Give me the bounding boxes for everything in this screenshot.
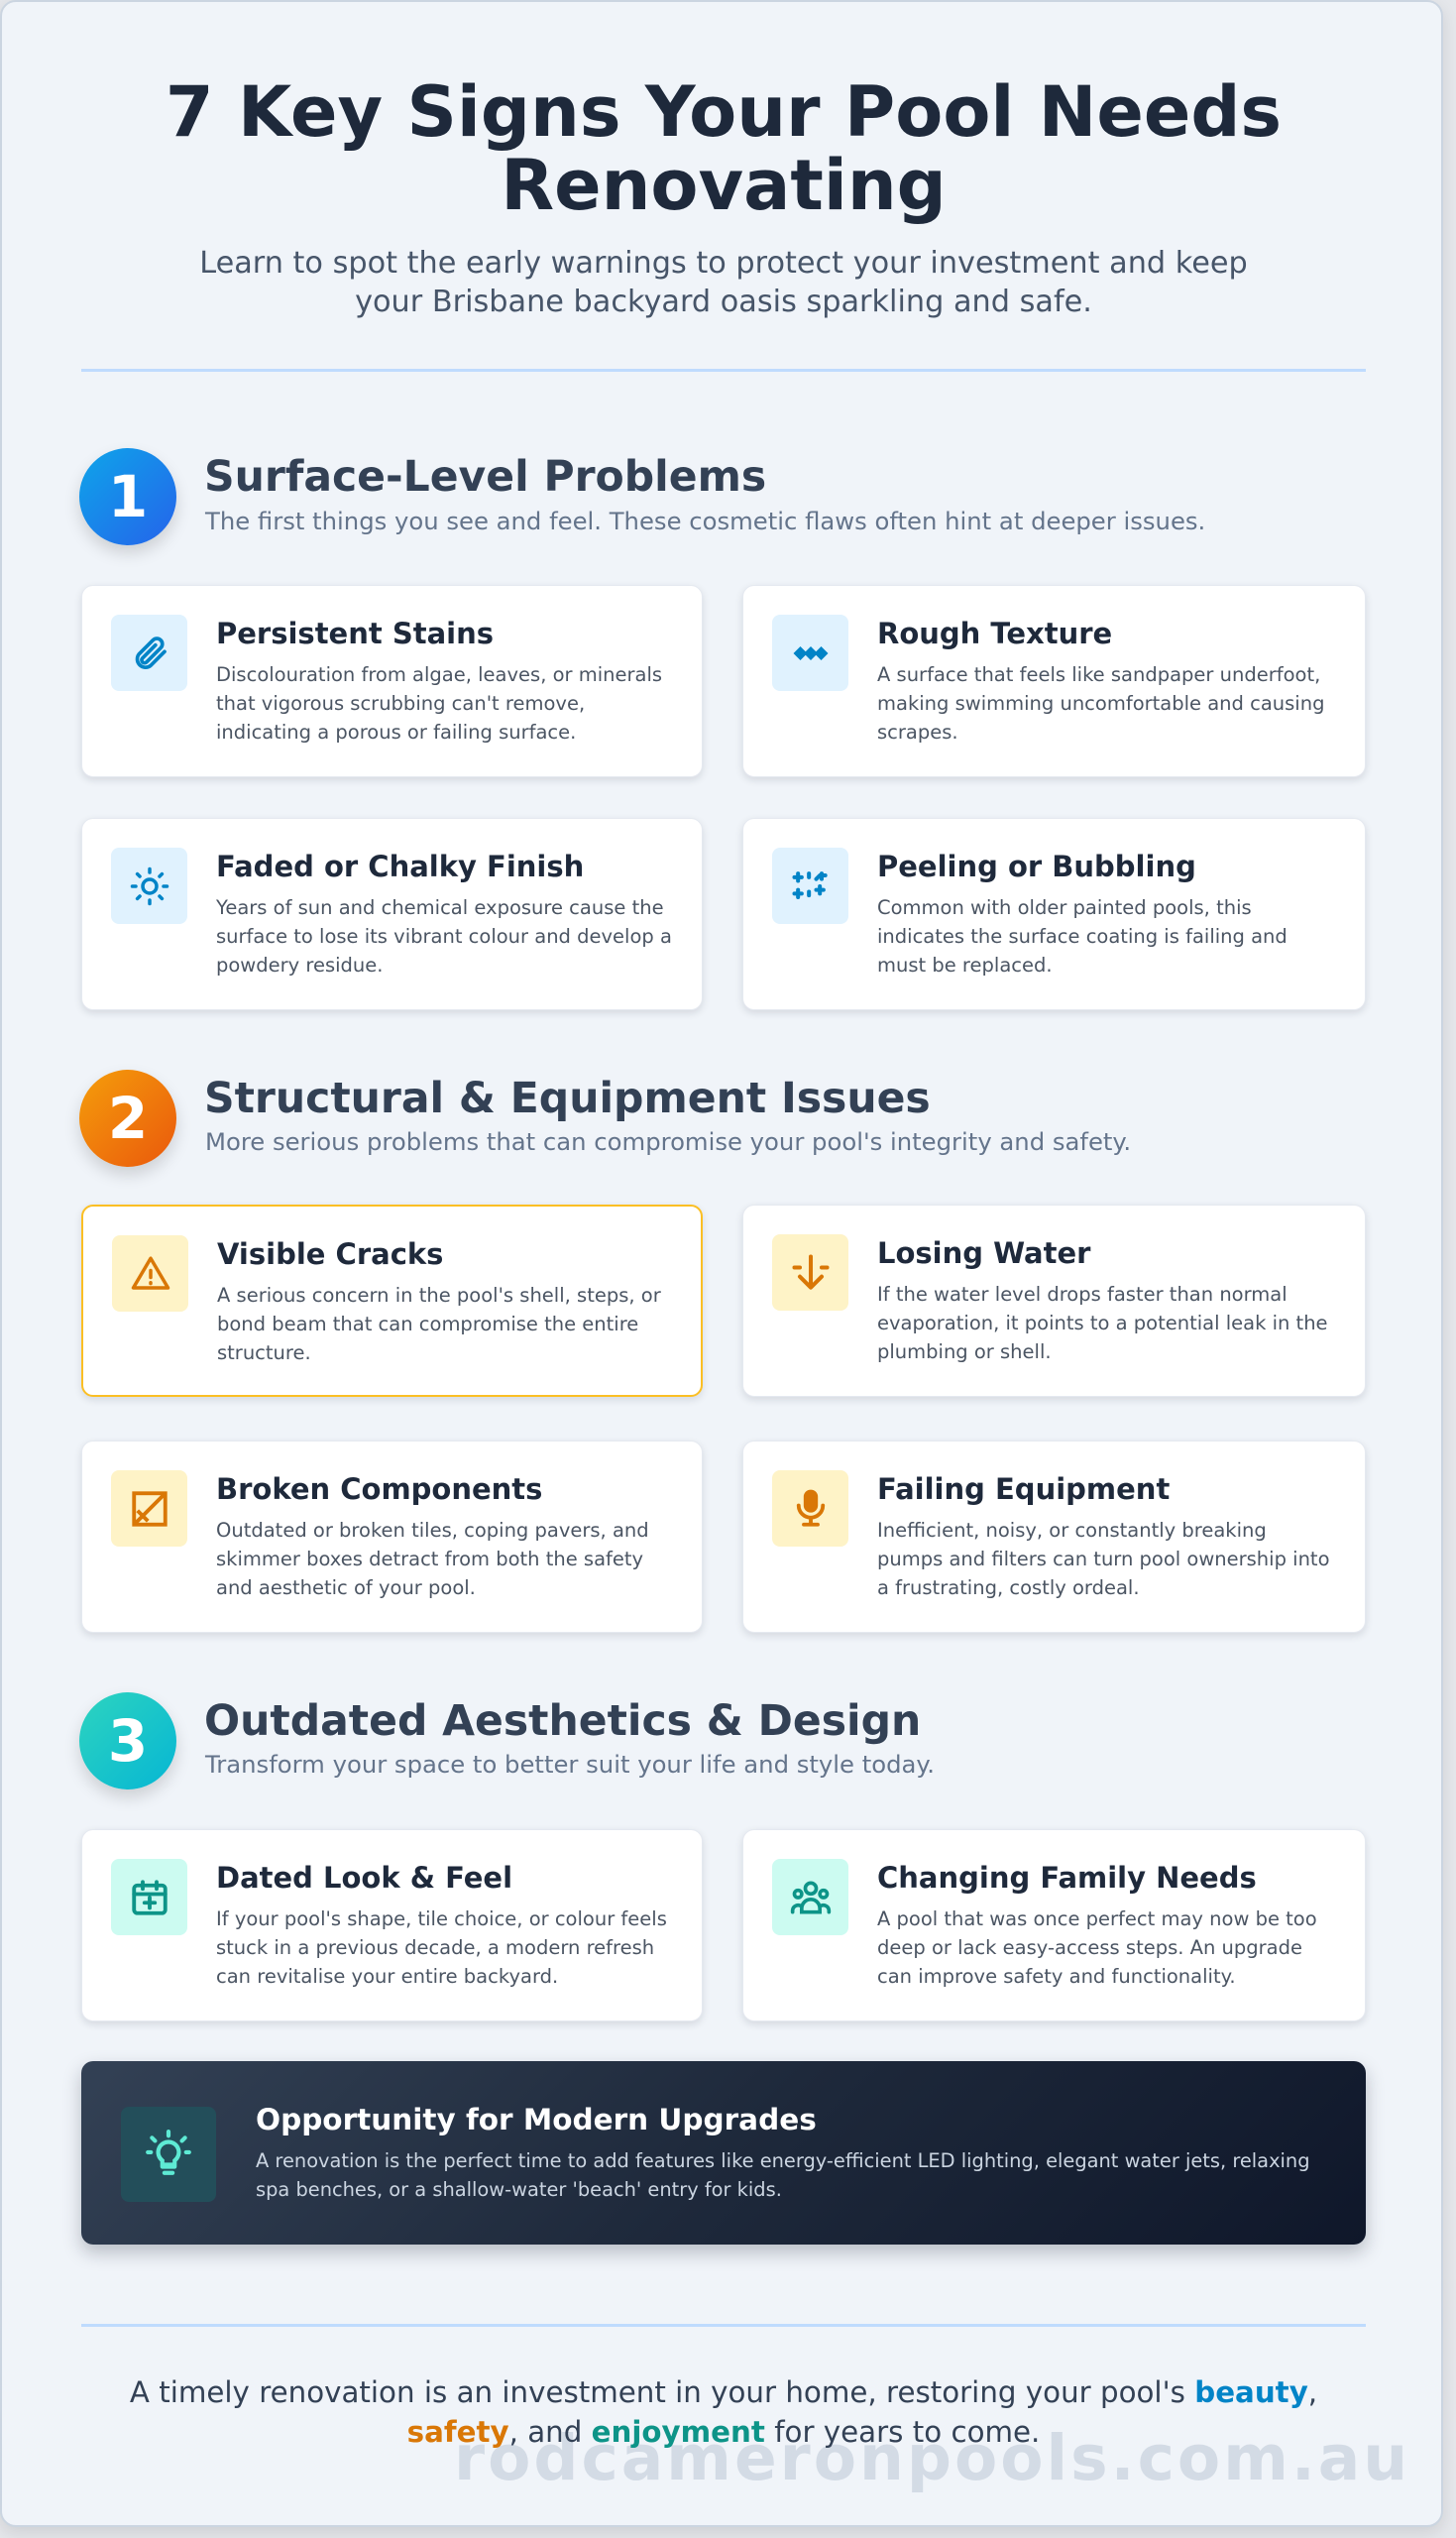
card: faded finish: powdery residue. — [216, 954, 383, 977]
card: visible cracks: Visible Cracks — [217, 1237, 443, 1271]
card: persistent stains: Discolouration from algae, leaves, or minerals — [216, 663, 662, 686]
card: failing equipment: Failing Equipment — [877, 1472, 1170, 1506]
icon: texture — [772, 615, 848, 691]
card: broken components: skimmer boxes detract from both the safety — [216, 1548, 643, 1570]
icon: paperclip — [111, 615, 187, 691]
watermark: rodcameronpools.com.au — [454, 2422, 1410, 2494]
section 3 number badge: 3 — [108, 1707, 148, 1775]
card: family needs: A pool that was once perfect may now be too — [877, 1907, 1317, 1930]
icon: microphone — [772, 1470, 848, 1547]
banner title: Opportunity for Modern Upgrades — [256, 2103, 817, 2136]
title: Renovating — [501, 145, 947, 226]
card: visible cracks: A serious concern in the pool's shell, steps, or — [217, 1284, 661, 1307]
banner text: spa benches, or a shallow-water 'beach' entry for kids. — [256, 2178, 782, 2201]
card: losing water: plumbing or shell. — [877, 1340, 1052, 1363]
icon: calendar — [111, 1859, 187, 1935]
card: dated look: stuck in a previous decade, a modern refresh — [216, 1936, 654, 1959]
card: family needs: deep or lack easy-access steps. An upgrade — [877, 1936, 1302, 1959]
card: broken components — [81, 1441, 703, 1633]
subtitle: Learn to spot the early warnings to protect your investment and keep — [199, 246, 1248, 281]
card: rough texture: Rough Texture — [877, 617, 1112, 650]
icon: sparkles — [772, 848, 848, 924]
section 3 number badge — [79, 1692, 176, 1789]
card: peeling: Peeling or Bubbling — [877, 850, 1196, 883]
icon: sun — [111, 848, 187, 924]
banner: modern upgrades — [81, 2061, 1366, 2245]
card: peeling: indicates the surface coating is failing and — [877, 925, 1288, 948]
card: broken components: and aesthetic of your pool. — [216, 1576, 476, 1599]
title — [166, 71, 1282, 226]
card: faded finish: Faded or Chalky Finish — [216, 850, 584, 883]
banner text — [256, 2149, 1310, 2201]
icon: warning — [112, 1235, 188, 1312]
card: faded finish — [81, 818, 703, 1010]
card: persistent stains: indicating a porous or failing surface. — [216, 721, 576, 744]
card: rough texture: making swimming uncomfortable and causing — [877, 692, 1324, 715]
card: peeling — [742, 818, 1366, 1010]
card: persistent stains: that vigorous scrubbing can't remove, — [216, 692, 585, 715]
section 2 number badge: 2 — [108, 1085, 148, 1152]
card: broken components: Broken Components — [216, 1472, 542, 1506]
card: failing equipment: pumps and filters can turn pool ownership into — [877, 1548, 1330, 1570]
card: family needs: Changing Family Needs — [877, 1861, 1257, 1895]
icon: lightbulb — [121, 2107, 216, 2202]
card: faded finish: Years of sun and chemical exposure cause the — [216, 896, 664, 919]
card: visible cracks — [81, 1205, 703, 1397]
section 2 number badge — [79, 1070, 176, 1167]
card: peeling: must be replaced. — [877, 954, 1053, 977]
footer text — [130, 2375, 1317, 2449]
card: persistent stains: Persistent Stains — [216, 617, 494, 650]
icon: arrow down — [772, 1234, 848, 1311]
section 1 heading: Surface-Level Problems — [204, 453, 766, 502]
title: 7 Key Signs Your Pool Needs — [166, 71, 1282, 153]
icon: broken tile — [111, 1470, 187, 1547]
banner text: A renovation is the perfect time to add features like energy-efficient LED lighting, elegant water jets, relaxing — [256, 2149, 1310, 2172]
card: losing water: Losing Water — [877, 1236, 1090, 1270]
card: broken components: Outdated or broken tiles, coping pavers, and — [216, 1519, 649, 1542]
subtitle — [199, 246, 1248, 319]
section 2 subheading: More serious problems that can compromise your pool's integrity and safety. — [205, 1127, 1131, 1156]
footer text: safety, and enjoyment for years to come. — [407, 2415, 1040, 2449]
card: dated look: can revitalise your entire backyard. — [216, 1965, 558, 1988]
card: family needs: can improve safety and functionality. — [877, 1965, 1236, 1988]
card: losing water — [742, 1205, 1366, 1397]
section 2 heading: Structural & Equipment Issues — [204, 1075, 931, 1123]
section 1 subheading: The first things you see and feel. These cosmetic flaws often hint at deeper issues. — [205, 507, 1205, 535]
card: failing equipment — [742, 1441, 1366, 1633]
card: dated look — [81, 1829, 703, 2021]
card: family needs — [742, 1829, 1366, 2021]
footer text: A timely renovation is an investment in your home, restoring your pool's beauty, — [130, 2375, 1317, 2409]
card: failing equipment: Inefficient, noisy, or constantly breaking — [877, 1519, 1267, 1542]
card: failing equipment: a frustrating, costly ordeal. — [877, 1576, 1140, 1599]
card: rough texture — [742, 585, 1366, 777]
card: losing water: evaporation, it points to a potential leak in the — [877, 1312, 1328, 1334]
section 1 number badge — [79, 448, 176, 545]
card: losing water: If the water level drops faster than normal — [877, 1283, 1288, 1306]
card: persistent stains — [81, 585, 703, 777]
card: visible cracks: bond beam that can compromise the entire — [217, 1313, 638, 1335]
section 3 heading: Outdated Aesthetics & Design — [204, 1697, 921, 1746]
section 3 subheading: Transform your space to better suit your life and style today. — [205, 1750, 935, 1779]
card: faded finish: surface to lose its vibrant colour and develop a — [216, 925, 672, 948]
section 1 number badge: 1 — [108, 463, 148, 530]
subtitle: your Brisbane backyard oasis sparkling and safe. — [355, 285, 1092, 319]
card: peeling: Common with older painted pools, this — [877, 896, 1252, 919]
card: visible cracks: structure. — [217, 1341, 311, 1364]
card: rough texture: scrapes. — [877, 721, 958, 744]
card: dated look: If your pool's shape, tile choice, or colour feels — [216, 1907, 667, 1930]
card: dated look: Dated Look & Feel — [216, 1861, 512, 1895]
icon: family — [772, 1859, 848, 1935]
card: rough texture: A surface that feels like sandpaper underfoot, — [877, 663, 1320, 686]
